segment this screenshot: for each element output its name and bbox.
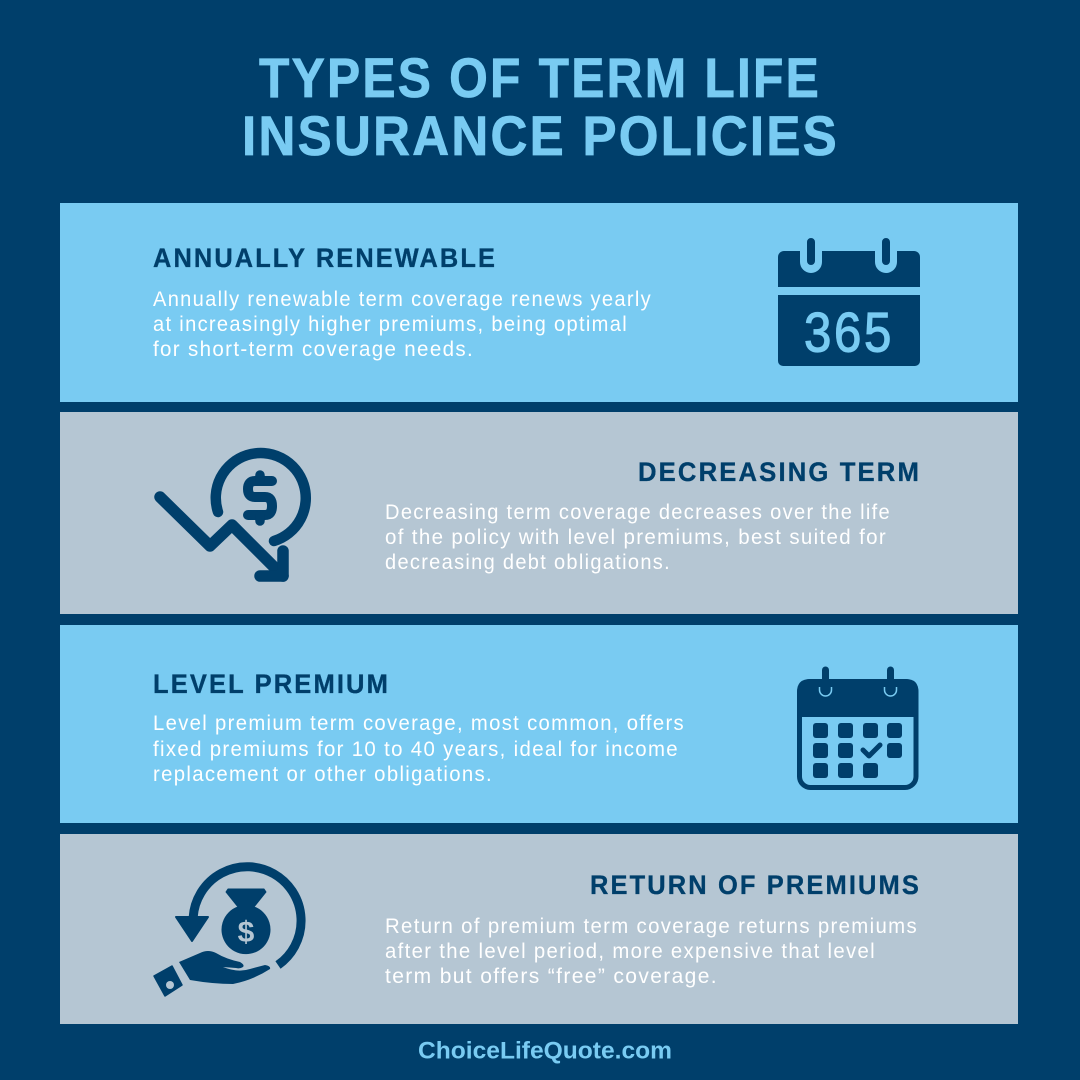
icon: money bag return in hand: $ <box>238 916 255 949</box>
footer: website: ChoiceLifeQuote.com <box>418 1038 672 1064</box>
panel: annually renewable <box>60 203 1018 402</box>
icon: 365 calendar <box>778 242 920 366</box>
panel: decreasing term <box>60 412 1018 614</box>
panel: return of premiums <box>60 834 1018 1024</box>
heading: level premium: LEVEL PREMIUM <box>153 669 390 699</box>
heading: return of premiums: RETURN OF PREMIUMS <box>590 870 921 900</box>
icon: money bag return in hand <box>154 867 301 996</box>
title <box>242 46 839 167</box>
text: level premium description: fixed premiums for 10 to 40 years, ideal for income <box>153 737 679 761</box>
text: decreasing term description <box>385 500 891 574</box>
text: annually renewable description: at increasingly higher premiums, being optimal <box>153 312 628 336</box>
icon: 365 calendar: 365 <box>804 300 894 364</box>
icon: calendar with check <box>797 670 918 788</box>
heading: annually renewable: ANNUALLY RENEWABLE <box>153 243 497 273</box>
text: decreasing term description: of the policy with level premiums, best suited for <box>385 525 887 549</box>
text: annually renewable description <box>153 287 652 361</box>
text: return of premiums description <box>385 914 918 988</box>
text: level premium description: Level premium term coverage, most common, offers <box>153 711 685 735</box>
text: decreasing term description: Decreasing term coverage decreases over the life <box>385 500 891 524</box>
title: INSURANCE POLICIES <box>242 104 839 167</box>
text: level premium description: replacement or other obligations. <box>153 762 493 786</box>
text: annually renewable description: Annually renewable term coverage renews yearly <box>153 287 652 311</box>
text: return of premiums description: Return of premium term coverage returns premiums <box>385 914 918 938</box>
title: TYPES OF TERM LIFE <box>259 46 821 109</box>
icon: falling money arrow <box>160 453 306 576</box>
text: decreasing term description: decreasing debt obligations. <box>385 550 671 574</box>
text: return of premiums description: term but offers “free” coverage. <box>385 964 718 988</box>
text: annually renewable description: for short-term coverage needs. <box>153 337 474 361</box>
text: return of premiums description: after the level period, more expensive that level <box>385 939 876 963</box>
panel: level premium <box>60 625 1018 823</box>
heading: decreasing term: DECREASING TERM <box>638 457 921 487</box>
text: level premium description <box>153 711 685 786</box>
